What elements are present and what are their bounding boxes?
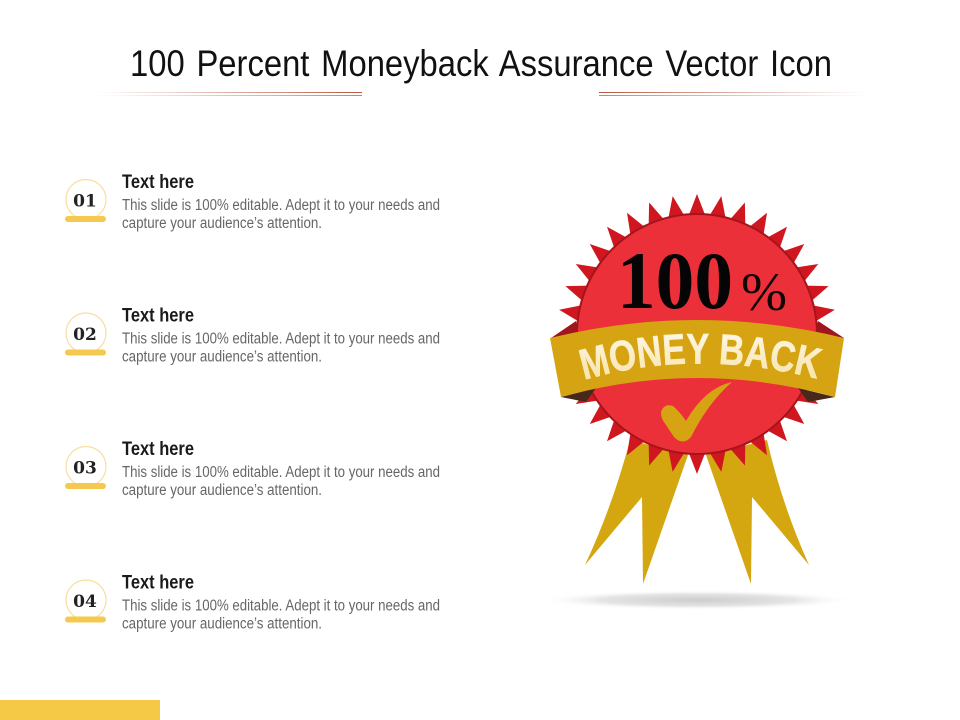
title underline right (599, 92, 866, 96)
item 03 body: This slide is 100% editable. Adept it to your needs and (122, 464, 440, 481)
title: 100 Percent Moneyback Assurance Vector Icon (130, 43, 832, 84)
item 01 body: This slide is 100% editable. Adept it to your needs and (122, 197, 440, 214)
check mark (661, 382, 732, 442)
title underline left (95, 92, 362, 96)
item 02 heading: Text here (122, 306, 194, 326)
star burst (557, 194, 837, 474)
item 03 heading: Text here (122, 439, 194, 460)
item 03 body (122, 464, 440, 499)
number badge 02: 02 (73, 325, 97, 345)
ground shadow (537, 590, 857, 610)
percent sign: % (741, 262, 787, 322)
number badge 04: 04 (73, 592, 97, 612)
item 01 heading: Text here (122, 172, 194, 193)
red disc (577, 214, 817, 454)
list item 01 (65, 172, 440, 232)
item 01 body: capture your audience’s attention. (122, 215, 322, 232)
money back text: MONEY BACK (578, 334, 824, 380)
number badge 01 (65, 180, 106, 222)
number badge 01: 01 (73, 192, 97, 212)
ribbon tail right (706, 440, 809, 584)
item 04 heading: Text here (122, 572, 194, 594)
list item 02 (65, 306, 440, 366)
list item 04 (65, 572, 440, 632)
number badge 02 (65, 313, 106, 356)
number badge 04 (65, 580, 106, 622)
ribbon fold right (798, 321, 844, 402)
badge illustration (550, 194, 844, 608)
ribbon tail left (585, 440, 688, 584)
ribbon fold left (551, 321, 596, 402)
gold banner (550, 320, 844, 397)
item 02 body: capture your audience’s attention. (122, 348, 322, 366)
item 03 body: capture your audience’s attention. (122, 482, 322, 499)
number badge 03: 03 (73, 458, 97, 478)
list item 03 (65, 439, 440, 499)
100 percent text: 100 (617, 235, 733, 326)
item 02 body (122, 330, 440, 366)
item 02 body: This slide is 100% editable. Adept it to your needs and (122, 330, 440, 348)
item 04 body: capture your audience’s attention. (122, 616, 322, 632)
item 04 body: This slide is 100% editable. Adept it to your needs and (122, 598, 440, 614)
item 04 body (122, 598, 440, 632)
number badge 03 (65, 446, 106, 489)
corner accent bar (0, 700, 160, 720)
item 01 body (122, 197, 440, 232)
